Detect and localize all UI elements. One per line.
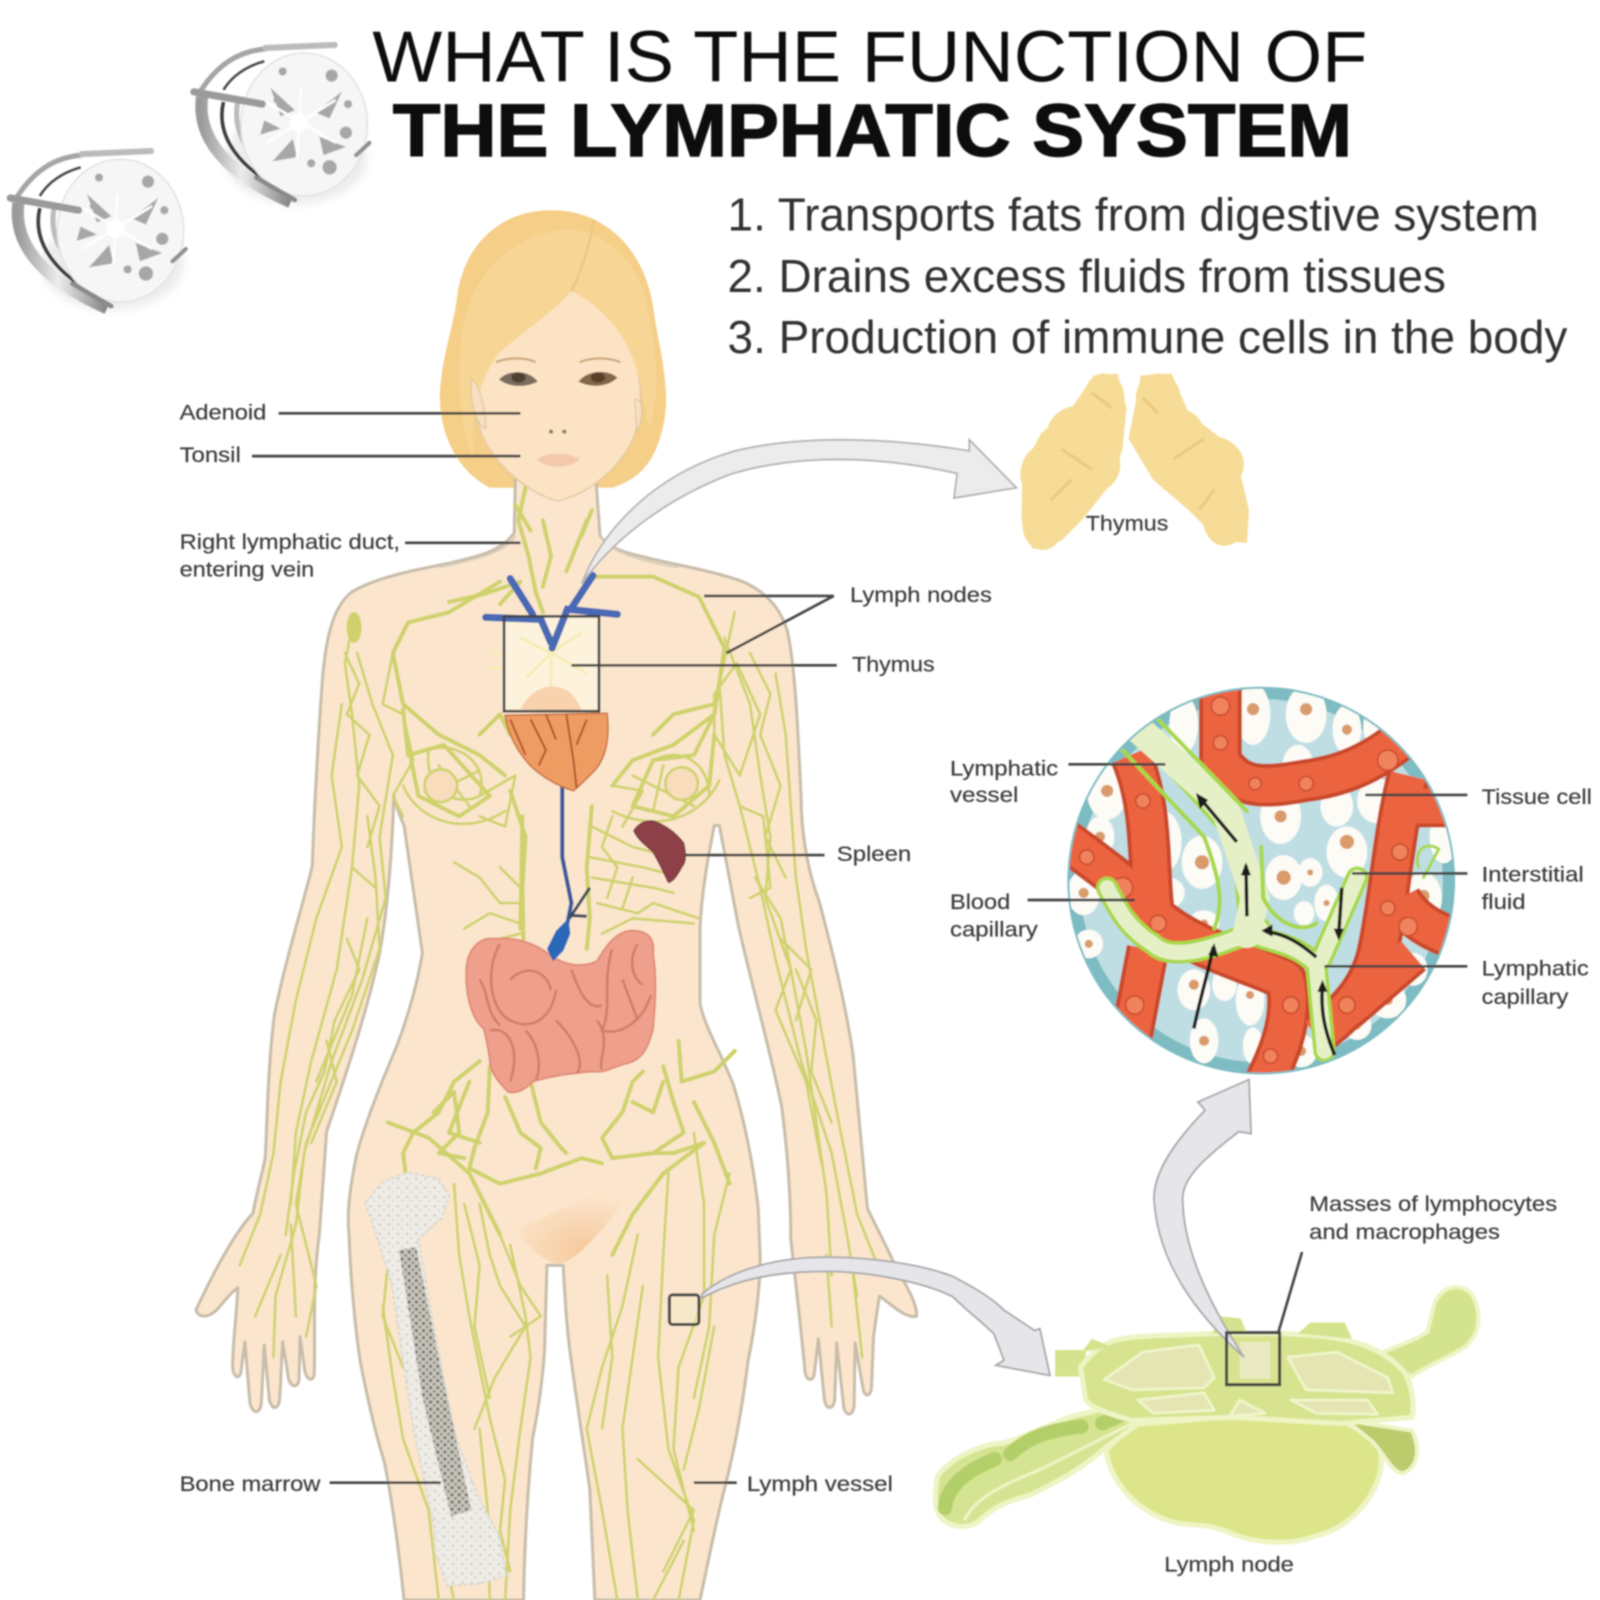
label: masses of lymphocytes	[1279, 1192, 1557, 1332]
label: lymphatic capillary	[1324, 957, 1589, 1009]
heart lower	[505, 713, 608, 791]
mouth	[537, 454, 580, 467]
label: lymph nodes: Lymph nodes	[850, 583, 992, 607]
label: right lymphatic duct: Right lymphatic duct,	[180, 530, 400, 554]
hair front	[459, 230, 656, 459]
label: blood capillary: Blood	[950, 890, 1010, 914]
cortex lobes	[1104, 1345, 1393, 1416]
label: interstitial fluid: Interstitial	[1482, 863, 1584, 887]
heart	[505, 686, 608, 791]
breast vessels	[403, 748, 719, 827]
left leg vessels	[383, 1184, 541, 1600]
thymus left lobe	[1020, 373, 1127, 550]
marrow core	[399, 1247, 471, 1516]
hair back	[440, 210, 666, 488]
label: interstitial fluid	[1352, 863, 1584, 914]
node capsule lower lobe	[1106, 1416, 1381, 1542]
icon: earring stud lower	[10, 151, 186, 310]
small thigh box	[669, 1295, 699, 1324]
right upper afferent vessel	[1371, 1287, 1478, 1377]
thymus zoom box	[504, 616, 599, 711]
rib vessels	[454, 816, 699, 944]
label: masses of lymphocytes: and macrophages	[1309, 1220, 1500, 1244]
title	[372, 17, 1367, 172]
label: lymphatic vessel: vessel	[950, 783, 1018, 807]
title line one: WHAT IS THE FUNCTION OF	[372, 17, 1367, 98]
pelvic vessels	[388, 1041, 735, 1255]
thymus area pale fill	[504, 616, 599, 711]
right eye	[579, 358, 620, 386]
label: interstitial fluid: fluid	[1482, 890, 1526, 914]
title line two: THE LYMPHATIC SYSTEM	[393, 89, 1352, 172]
node upper body	[1081, 1334, 1413, 1423]
tissue detail circle	[1066, 686, 1456, 1076]
arrow: thigh to lymph node	[702, 1257, 1050, 1376]
label: right lymphatic duct	[180, 530, 520, 582]
label: adenoid: Adenoid	[180, 400, 266, 424]
label: thymus enlarged: Thymus	[1086, 512, 1168, 536]
label: tissue cell: Tissue cell	[1482, 785, 1592, 809]
left stub vessel	[1055, 1350, 1086, 1377]
thymus right lobe	[1129, 373, 1249, 546]
intestines	[466, 931, 655, 1092]
neck vessels	[449, 488, 592, 612]
pubic shading	[515, 1168, 653, 1263]
arrow: heart region to thymus	[582, 440, 1016, 584]
left eye	[496, 358, 538, 386]
label: lymphatic capillary: capillary	[1482, 985, 1569, 1009]
duct branches	[569, 888, 590, 918]
lymphatic vessels	[1107, 719, 1439, 1051]
label: masses of lymphocytes: Masses of lymphocytes	[1309, 1192, 1557, 1216]
lymphatic vessel network	[240, 488, 878, 1600]
function 1: 1. Transports fats from digestive system	[728, 189, 1539, 241]
nose	[549, 430, 566, 434]
list of functions	[728, 189, 1567, 363]
label: blood capillary: capillary	[950, 918, 1038, 942]
left efferent vessel	[935, 1404, 1147, 1527]
lymph node	[935, 1287, 1478, 1542]
shoulder lines	[439, 536, 679, 567]
right arm vessels	[714, 612, 878, 1357]
heart upper	[520, 686, 582, 711]
tissue cells	[1067, 684, 1458, 1067]
label: thymus on body: Thymus	[852, 652, 935, 676]
label: tonsil: Tonsil	[180, 443, 241, 467]
node detail box	[1227, 1333, 1280, 1385]
blood capillaries	[1068, 689, 1451, 1074]
hair parting	[571, 219, 594, 291]
arrow: lymph node to tissue circle	[1154, 1080, 1251, 1357]
flow arrows	[1194, 798, 1342, 1055]
label: lymph nodes	[704, 583, 992, 653]
top tufts	[1082, 1316, 1352, 1352]
cisterna chyli	[547, 918, 570, 961]
interstitial fluid background	[1067, 687, 1455, 1074]
body silhouette	[196, 480, 917, 1600]
label: spleen: Spleen	[837, 842, 911, 866]
thymus enlarged	[1020, 373, 1249, 550]
thymus area lines	[490, 633, 587, 704]
right leg vessels	[587, 1133, 730, 1600]
cell nuclei	[1079, 703, 1430, 1056]
blue veins and duct	[486, 576, 617, 961]
label: lymph vessel: Lymph vessel	[747, 1472, 893, 1496]
function 2: 2. Drains excess fluids from tissues	[728, 250, 1446, 302]
right lower vessel	[1346, 1420, 1417, 1473]
label: lymphatic vessel: Lymphatic	[950, 757, 1058, 781]
face	[474, 291, 641, 501]
left vessel shading	[945, 1410, 1133, 1508]
label: bone marrow: Bone marrow	[180, 1472, 321, 1496]
thoracic duct	[562, 776, 571, 923]
femur outline	[365, 1172, 506, 1586]
label: lymphatic capillary: Lymphatic	[1482, 957, 1589, 981]
label: lymphatic vessel	[950, 757, 1165, 807]
left arm vessels	[240, 613, 413, 1357]
left vessel highlight	[964, 1420, 1138, 1520]
trunk vessels	[510, 791, 592, 949]
selected lobule	[1240, 1342, 1270, 1379]
label: lymph node: Lymph node	[1164, 1552, 1294, 1576]
thymus shading	[1051, 393, 1214, 510]
spleen	[634, 821, 685, 883]
subclavian veins	[486, 576, 617, 648]
ears	[471, 380, 642, 431]
function 3: 3. Production of immune cells in the body	[728, 311, 1567, 363]
red blood cells	[1080, 697, 1417, 1063]
label: blood capillary	[950, 890, 1135, 942]
bone marrow femur	[365, 1172, 506, 1586]
label: right lymphatic duct: entering vein	[180, 558, 314, 582]
chest vessels	[393, 577, 724, 816]
icon: earring stud upper	[194, 45, 369, 204]
body figure	[196, 210, 917, 1600]
inner fluid	[1080, 699, 1443, 1062]
